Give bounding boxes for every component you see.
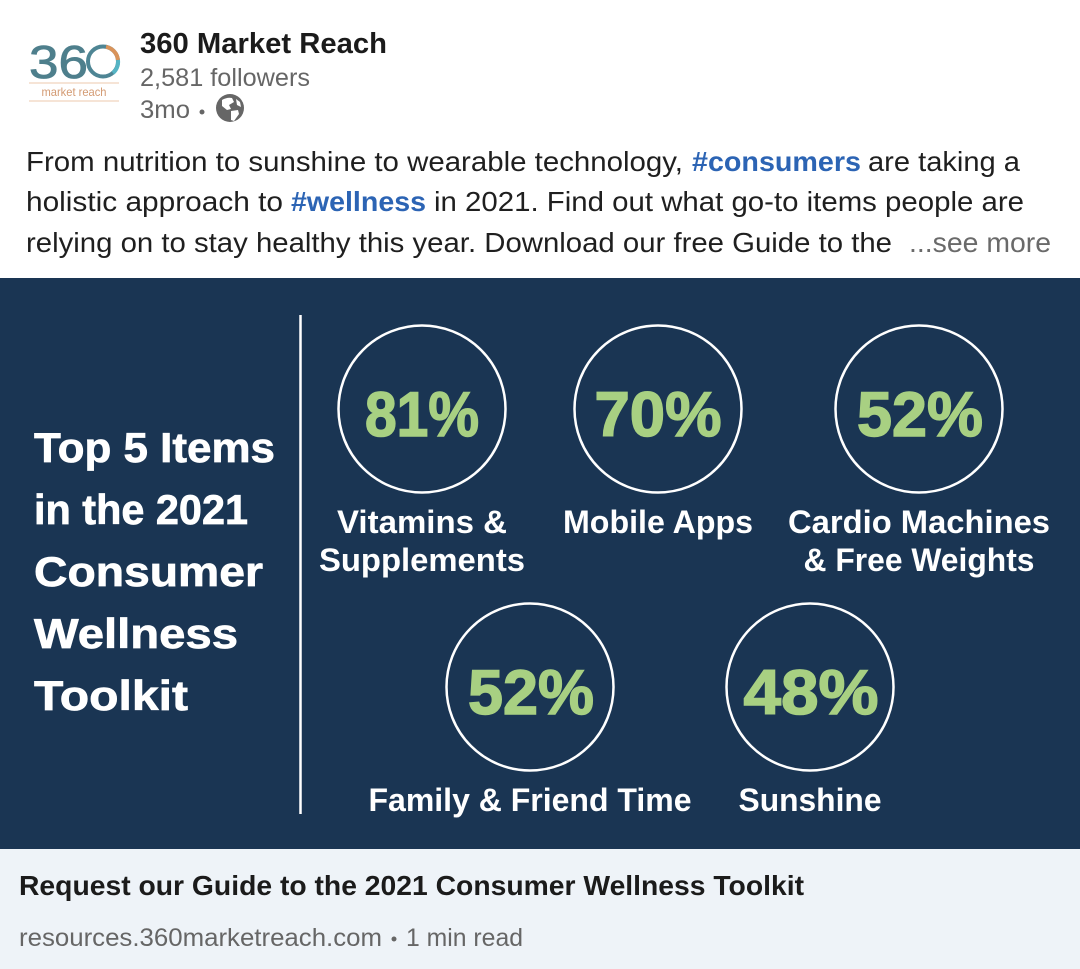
panel: link footer — [0, 849, 1080, 969]
header: company profile — [29, 28, 387, 124]
stat: 70% mobile apps: Mobile Apps — [563, 504, 753, 540]
stat: 70% mobile apps: 70% — [594, 380, 722, 450]
heading: Top 5 items: Toolkit — [34, 672, 188, 719]
icon: 360 Market Reach logo: market reach — [42, 85, 106, 99]
read time: 1 min read — [406, 924, 523, 952]
post body text: From nutrition to sunshine to wearable technology, — [26, 146, 683, 177]
icon: globe — [216, 94, 244, 122]
post age: 3mo — [140, 96, 190, 124]
stat: 48% sunshine: Sunshine — [738, 782, 882, 818]
heading: Top 5 items — [34, 424, 275, 719]
stat: 52% cardio machines and free weights — [788, 326, 1050, 578]
stat: 52% family and friend time: Family & Friend Time — [368, 782, 692, 818]
stat: 52% cardio machines and free weights: & Free Weights — [804, 542, 1034, 578]
heading: Top 5 items: Wellness — [34, 610, 238, 657]
heading: Top 5 items: in the 2021 — [34, 486, 248, 533]
stat: 52% cardio machines and free weights: 52% — [857, 380, 983, 450]
post body text: ...see more — [909, 227, 1051, 258]
panel: infographic — [0, 278, 1080, 849]
post body text: relying on to stay healthy this year. Download our free Guide to the — [26, 227, 892, 258]
stat: 48% sunshine — [726, 604, 894, 818]
link source: resources.360marketreach.com — [19, 924, 382, 952]
heading: Top 5 items: Consumer — [34, 548, 263, 595]
stat: 70% mobile apps — [563, 326, 753, 540]
post body text: holistic approach to — [26, 186, 283, 217]
company name: 360 Market Reach — [140, 28, 387, 60]
stat: 52% cardio machines and free weights: Cardio Machines — [788, 504, 1050, 540]
separator dot — [200, 110, 204, 114]
post body text: #consumers — [692, 146, 861, 177]
stat: 48% sunshine: 48% — [744, 658, 878, 728]
stat: 52% family and friend time: 52% — [468, 658, 594, 728]
stat: 81% vitamins and supplements: 81% — [365, 380, 479, 450]
stat: 81% vitamins and supplements: Vitamins & — [337, 504, 507, 540]
post body text: in 2021. Find out what go-to items people are — [434, 186, 1024, 217]
heading: Top 5 items: Top 5 Items — [34, 424, 275, 471]
stat: 81% vitamins and supplements: Supplements — [319, 542, 525, 578]
post body text — [26, 146, 1051, 258]
post body text: #wellness — [291, 186, 426, 217]
separator dot — [392, 936, 396, 942]
stat: 52% family and friend time — [368, 604, 692, 818]
stat: 81% vitamins and supplements — [319, 326, 525, 578]
follower count: 2,581 followers — [140, 64, 310, 92]
icon: 360 Market Reach logo — [29, 36, 119, 101]
icon: 360 Market Reach logo: 36 — [29, 36, 88, 88]
post body text: are taking a — [868, 146, 1020, 177]
link title: Request our Guide to the 2021 Consumer Wellness Toolkit — [19, 870, 804, 901]
